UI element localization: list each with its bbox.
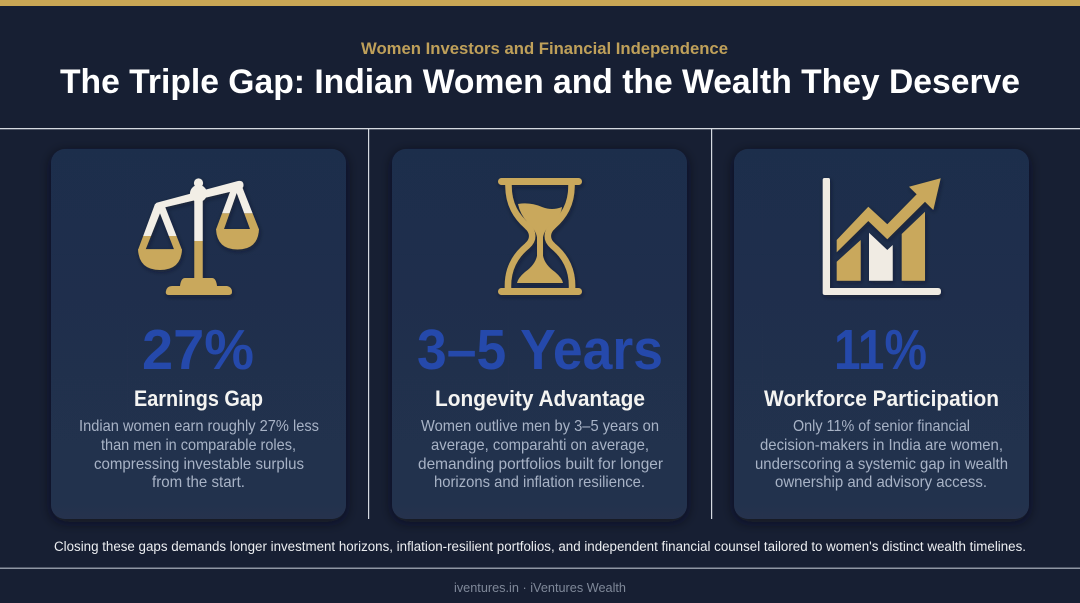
text block: ownership and advisory access. [775,474,987,491]
footer source: iventures.in · iVentures Wealth [454,580,626,595]
icon: growth chart [823,178,941,295]
heading: Workforce Participation [764,386,999,411]
heading: Longevity Advantage [435,386,645,411]
text block: horizons and inflation resilience. [434,474,645,491]
stat: 3–5 Years [417,318,663,382]
text block: than men in comparable roles, [101,437,296,454]
text block: decision-makers in India are women, [760,437,1003,454]
text block: Indian women earn roughly 27% less [79,418,319,435]
text block: compressing investable surplus [94,456,304,473]
text block [755,418,1008,491]
text block: underscoring a systemic gap in wealth [755,456,1008,473]
text block [79,418,319,491]
closing note: Closing these gaps demands longer investment horizons, inflation-resilient portfolios, and independent financial counsel tailored to women's distinct wealth timelines. [54,539,1026,554]
heading: Earnings Gap [134,386,263,411]
text block: demanding portfolios built for longer [418,456,664,473]
text block: from the start. [152,474,245,491]
icon: hourglass [498,178,582,295]
panel: workforce participation [734,149,1029,519]
panel: longevity advantage [392,149,687,519]
title: The Triple Gap: Indian Women and the Wealth They Deserve [60,63,1020,101]
text block: average, comparahti on average, [431,437,649,454]
text block: Women outlive men by 3–5 years on [421,418,659,435]
text block [418,418,664,491]
stat: 27% [142,318,254,382]
panel: earnings gap [51,149,346,519]
text block: Only 11% of senior financial [793,418,970,435]
eyebrow heading: Women Investors and Financial Independence [361,40,728,58]
stat: 11% [834,318,927,382]
icon: balance scale [138,178,259,295]
